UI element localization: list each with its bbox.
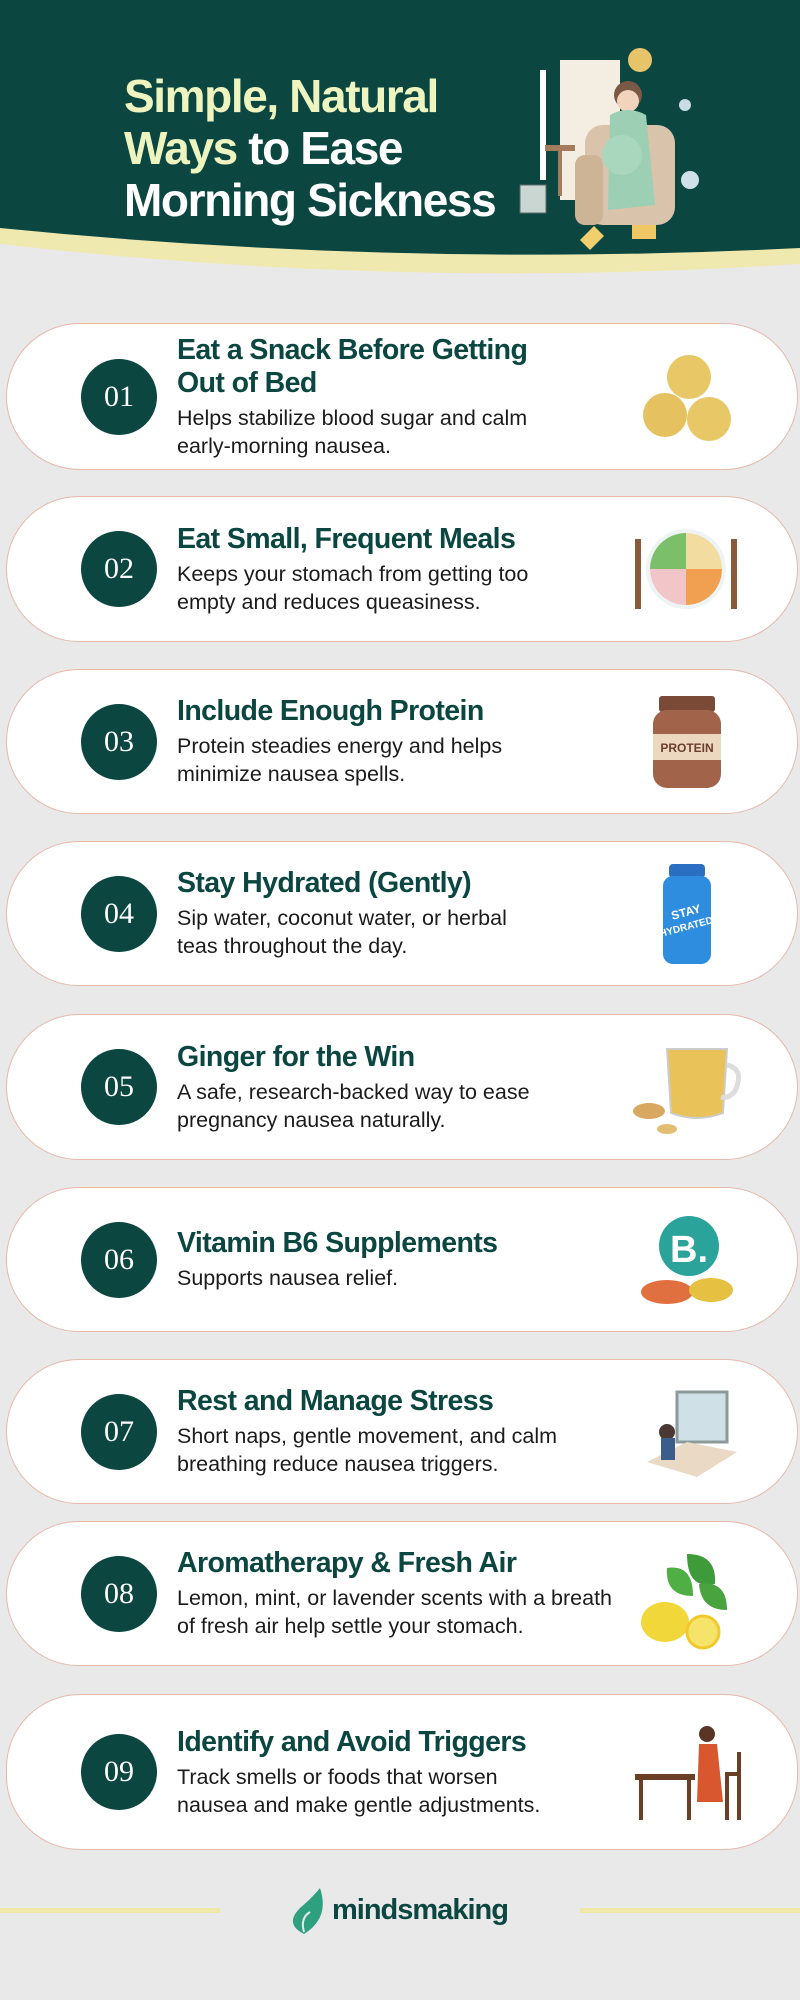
icon: leaf bbox=[292, 1888, 323, 1934]
card 9 bbox=[6, 1694, 798, 1850]
card 7 bbox=[6, 1359, 798, 1504]
number 08: 08 bbox=[104, 1576, 134, 1610]
text 8: Lemon, mint, or lavender scents with a breath bbox=[177, 1586, 612, 1610]
icon: water bottle bbox=[658, 864, 714, 964]
icon: vitamin B bbox=[641, 1216, 733, 1304]
title bbox=[124, 70, 495, 226]
number 03: 03 bbox=[104, 724, 134, 758]
text 7: breathing reduce nausea triggers. bbox=[177, 1452, 499, 1476]
icon: protein jar: PROTEIN bbox=[660, 740, 714, 754]
text 4 bbox=[177, 867, 507, 958]
icon: protein jar bbox=[653, 696, 721, 788]
number 06 bbox=[81, 1222, 157, 1298]
number 03 bbox=[81, 704, 157, 780]
text 1: Out of Bed bbox=[177, 366, 317, 398]
text 1: Eat a Snack Before Getting bbox=[177, 334, 527, 366]
text 1 bbox=[177, 334, 527, 458]
text 8: Aromatherapy & Fresh Air bbox=[177, 1547, 516, 1579]
header illustration: pregnant woman in armchair bbox=[520, 48, 699, 250]
icon: woman at table bbox=[635, 1726, 741, 1820]
footer logo: mindsmaking bbox=[332, 1894, 508, 1926]
footer lines bbox=[0, 1908, 220, 1913]
text 3: minimize nausea spells. bbox=[177, 762, 405, 786]
text 6: Vitamin B6 Supplements bbox=[177, 1227, 497, 1259]
icon: resting scene bbox=[647, 1390, 737, 1477]
card 5 bbox=[6, 1014, 798, 1160]
text 5: A safe, research-backed way to ease bbox=[177, 1080, 530, 1104]
text 2: Keeps your stomach from getting too bbox=[177, 562, 528, 586]
text 2 bbox=[177, 522, 528, 614]
card 4 bbox=[6, 841, 798, 986]
number 05 bbox=[81, 1049, 157, 1125]
text 1: early-morning nausea. bbox=[177, 434, 391, 458]
card 6 bbox=[6, 1187, 798, 1332]
text 4: teas throughout the day. bbox=[177, 934, 407, 958]
text 8 bbox=[177, 1547, 612, 1638]
text 7: Rest and Manage Stress bbox=[177, 1385, 493, 1417]
number 04 bbox=[81, 876, 157, 952]
card 1 bbox=[6, 323, 798, 470]
text 1: Helps stabilize blood sugar and calm bbox=[177, 406, 527, 430]
text 5 bbox=[177, 1040, 530, 1132]
number 01: 01 bbox=[104, 380, 134, 412]
icon: vitamin B: B. bbox=[670, 1228, 708, 1270]
number 01 bbox=[81, 358, 157, 434]
number 04: 04 bbox=[104, 896, 134, 930]
title: Morning Sickness bbox=[124, 174, 495, 226]
text 5: pregnancy nausea naturally. bbox=[177, 1108, 446, 1132]
text 9: Track smells or foods that worsen bbox=[177, 1764, 498, 1788]
text 2: Eat Small, Frequent Meals bbox=[177, 522, 515, 554]
text 8: of fresh air help settle your stomach. bbox=[177, 1614, 524, 1638]
text 2: empty and reduces queasiness. bbox=[177, 590, 481, 614]
number 06: 06 bbox=[104, 1242, 134, 1276]
icon: crackers bbox=[643, 355, 731, 441]
number 07 bbox=[81, 1394, 157, 1470]
header background bbox=[0, 0, 800, 274]
text 4: Sip water, coconut water, or herbal bbox=[177, 906, 507, 930]
number 02 bbox=[81, 531, 157, 607]
icon: ginger tea bbox=[633, 1048, 741, 1134]
text 3: Protein steadies energy and helps bbox=[177, 734, 502, 758]
text 7 bbox=[177, 1385, 557, 1476]
number 08 bbox=[81, 1556, 157, 1632]
text 5: Ginger for the Win bbox=[177, 1040, 415, 1072]
number 02: 02 bbox=[104, 552, 134, 585]
card 3 bbox=[6, 669, 798, 814]
text 7: Short naps, gentle movement, and calm bbox=[177, 1424, 557, 1448]
title: Simple, Natural bbox=[124, 70, 438, 122]
number 09 bbox=[81, 1734, 157, 1810]
text 9 bbox=[177, 1726, 540, 1816]
text 6: Supports nausea relief. bbox=[177, 1266, 398, 1290]
text 4: Stay Hydrated (Gently) bbox=[177, 867, 471, 899]
icon: plate bbox=[635, 529, 737, 609]
title: Ways to Ease bbox=[124, 122, 402, 174]
text 6 bbox=[177, 1227, 497, 1290]
icon: water bottle: HYDRATED bbox=[658, 915, 714, 939]
text 9: Identify and Avoid Triggers bbox=[177, 1726, 526, 1758]
number 05: 05 bbox=[104, 1070, 134, 1103]
text 3 bbox=[177, 695, 502, 786]
icon: water bottle: STAY bbox=[670, 901, 702, 922]
card 8 bbox=[6, 1521, 798, 1666]
icon: lemon and mint bbox=[641, 1554, 727, 1650]
text 3: Include Enough Protein bbox=[177, 695, 484, 727]
footer logo bbox=[292, 1888, 508, 1934]
number 07: 07 bbox=[104, 1414, 134, 1448]
number 09: 09 bbox=[104, 1755, 134, 1788]
card 2 bbox=[6, 496, 798, 642]
text 9: nausea and make gentle adjustments. bbox=[177, 1792, 540, 1816]
